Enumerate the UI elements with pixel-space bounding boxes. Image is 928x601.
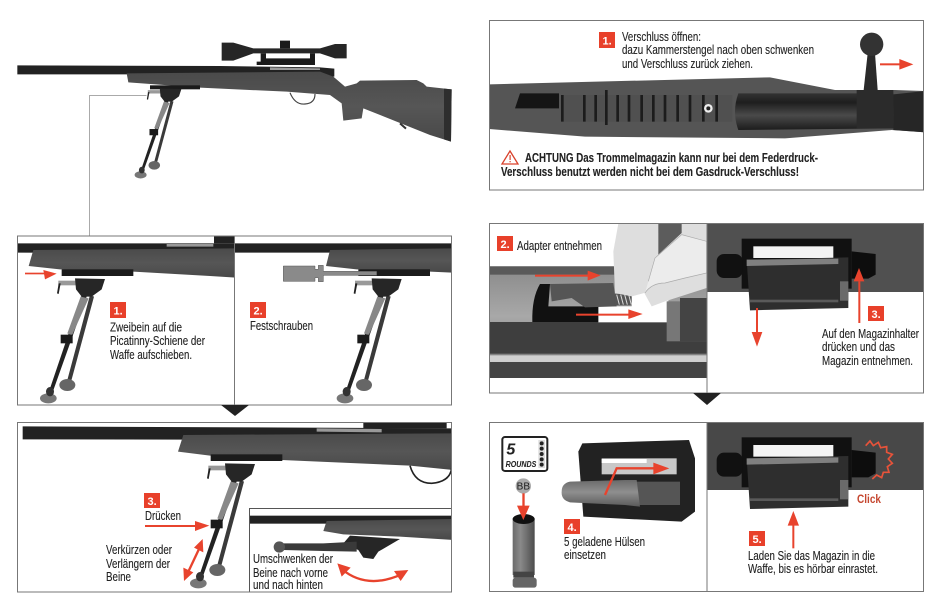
BB ball (516, 478, 531, 494)
stock detail (326, 248, 453, 273)
magazine (717, 437, 876, 509)
panel: bipod step 1 (10, 235, 237, 403)
block (667, 301, 707, 341)
main rifle with scope and bipod (17, 41, 452, 178)
inset text: und nach hinten (253, 578, 323, 592)
bipod (40, 278, 105, 403)
scope (222, 43, 347, 61)
panel: bipod step 2 (235, 243, 453, 403)
leg length text: Verlängern der (106, 557, 170, 571)
BB ball: BB (517, 482, 530, 493)
step badge 2: 2. (254, 306, 263, 318)
port (532, 284, 598, 322)
adapter (550, 283, 617, 307)
bolt handle (864, 53, 878, 90)
warning text: ACHTUNG Das Trommelmagazin kann nur bei dem Federdruck- (525, 151, 818, 165)
5 rounds icon: 5 (506, 441, 516, 458)
bolt instructions: Verschluss öffnen: (622, 30, 701, 44)
rail (358, 269, 430, 276)
panel: open the bolt (489, 30, 925, 179)
cartridge text: einsetzen (564, 548, 606, 562)
dark frame photo (707, 224, 924, 292)
white gap (598, 306, 668, 322)
barrel detail (235, 243, 453, 253)
step badge 3 right (868, 306, 884, 321)
step badge 3 (144, 493, 160, 508)
loading text (748, 549, 878, 576)
click zigzag (866, 441, 892, 479)
gun top view (489, 77, 925, 138)
step 1 text: Zweibein auf die (110, 320, 182, 334)
red arrow up (854, 268, 864, 323)
inset: folded bipod (249, 508, 456, 592)
step badge 5: 5. (752, 534, 762, 546)
leader line (90, 96, 146, 236)
magazine (717, 239, 876, 310)
bolt instructions (622, 30, 814, 71)
red double arrow (183, 539, 203, 581)
barrel detail (23, 426, 453, 440)
open magazine (562, 440, 695, 522)
bolt instructions: dazu Kammerstengel nach oben schwenken (622, 43, 814, 57)
red arrow down (517, 493, 530, 520)
step badge 5 (749, 531, 765, 546)
dark frame photo (707, 422, 924, 490)
inset text (253, 552, 333, 592)
inset bipod (343, 536, 400, 559)
step badge 1 (110, 302, 126, 318)
loading text: Waffe, bis es hörbar einrastet. (748, 562, 878, 576)
step badge 3: 3. (148, 496, 157, 508)
leg length text (106, 543, 172, 584)
panel: insert magazine (707, 422, 924, 576)
red arrow (25, 270, 57, 279)
bipod on rifle (135, 88, 181, 178)
step 2 text: Festschrauben (250, 319, 313, 333)
red swing arrow (337, 563, 408, 581)
bolt cylinder (735, 93, 893, 130)
screwdriver (283, 265, 377, 282)
step badge 2 right (497, 236, 513, 251)
panel: load cartridges (502, 437, 695, 588)
5 rounds icon: ROUNDS (506, 460, 537, 469)
step badge 1: 1. (114, 306, 123, 318)
cartridge text (564, 535, 645, 562)
leg length text: Beine (106, 570, 131, 584)
front rail (150, 85, 200, 89)
rear cone (893, 91, 925, 132)
step 3 press label: Drücken (145, 509, 181, 523)
trigger guard (410, 466, 452, 483)
red arrows (535, 271, 643, 319)
step 1 text: Waffe aufschieben. (110, 348, 192, 362)
click label: Click (857, 492, 881, 506)
red arrow (880, 59, 913, 70)
step badge 1 right: 1. (602, 36, 612, 48)
rail (211, 454, 282, 461)
step badge 4: 4. (568, 522, 577, 534)
step badge 2 (250, 302, 266, 318)
rail slots (562, 90, 717, 125)
inset text: Umschwenken der (253, 552, 333, 566)
rifle stock (127, 72, 452, 142)
trigger guard (290, 93, 315, 104)
step badge 3 right: 3. (872, 309, 881, 321)
5 rounds icon (502, 437, 547, 471)
stock detail (29, 248, 237, 278)
white screw (704, 104, 713, 113)
step badge 1 right (599, 32, 615, 48)
rail (62, 269, 133, 276)
panel: remove magazine (707, 224, 924, 368)
inset barrel (249, 516, 456, 524)
bolt instructions: und Verschluss zurück ziehen. (622, 57, 753, 71)
barrel photo (490, 266, 706, 356)
warning triangle icon (502, 151, 518, 164)
warning text: Verschluss benutzt werden nicht bei dem Gasdruck-Verschluss! (501, 165, 799, 179)
down arrow right (693, 393, 721, 405)
panel: bipod step 3 (23, 422, 456, 592)
adapter text: Adapter entnehmen (517, 239, 602, 253)
bipod (337, 278, 402, 403)
bipod (190, 463, 255, 588)
magazine text (822, 327, 919, 368)
down arrow left (221, 405, 249, 416)
red arrow into magazine (605, 468, 655, 495)
red arrow to button (145, 521, 209, 531)
step badge 2 right: 2. (500, 239, 510, 251)
leg length text: Verkürzen oder (106, 543, 172, 557)
inset stock (323, 519, 453, 540)
scope mount (257, 41, 315, 65)
step badge 4 (564, 519, 580, 534)
step 1 text (110, 320, 205, 362)
shell casing (513, 514, 537, 588)
spring (615, 294, 632, 305)
panel frames left top (18, 236, 452, 405)
bolt collar (856, 90, 894, 124)
rifle barrel (17, 65, 334, 77)
rail (562, 95, 732, 122)
step 1 text: Picatinny-Schiene der (110, 334, 205, 348)
panel: remove adapter (489, 224, 708, 378)
ejection port (515, 93, 559, 108)
loading text: Laden Sie das Magazin in die (748, 549, 875, 563)
cartridge text: 5 geladene Hülsen (564, 535, 645, 549)
sling swivel (400, 123, 406, 129)
magazine text: drücken und das (822, 340, 895, 354)
red arrow down (752, 308, 762, 347)
red arrow up (788, 511, 799, 548)
inset text: Beine nach vorne (253, 566, 328, 580)
barrel detail (10, 243, 237, 253)
stock detail (178, 433, 453, 470)
butt plate (444, 89, 452, 142)
hand (613, 224, 707, 306)
warning text (501, 151, 818, 179)
